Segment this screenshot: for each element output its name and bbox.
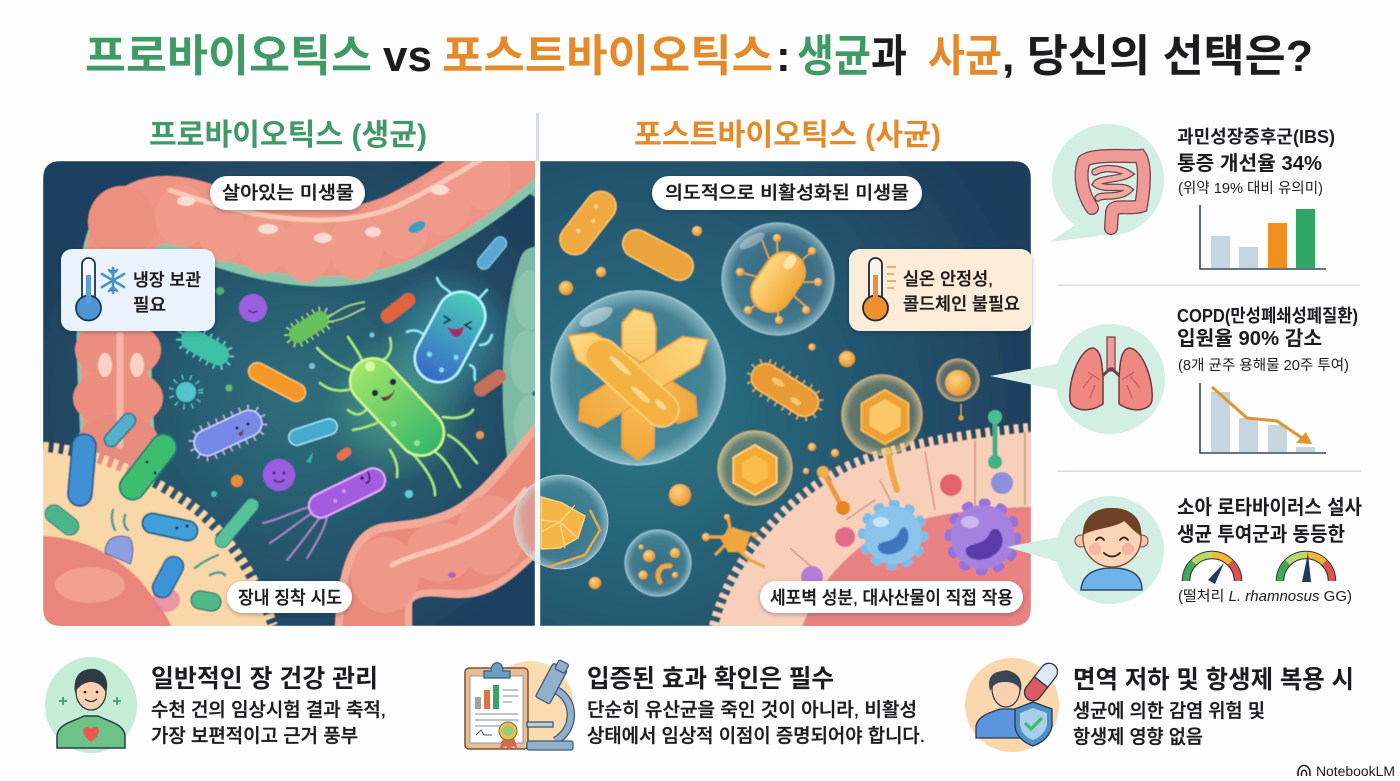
evidence: IBS: 과민성장중후군(IBS) [1177,127,1335,147]
bacteria attaching to villi [41,410,262,612]
callout: refrigeration required [61,249,215,331]
bubble: spiked capsule [722,223,834,335]
star-shaped fragment [702,514,765,567]
gauge: placebo [1186,555,1238,584]
colon upper band [73,138,546,470]
bottom item: immunocompromised and antibiotics: 항생제 영향 없음 [1073,726,1203,748]
icon: healthy person [45,657,137,753]
bottom item: proven efficacy: 단순히 유산균을 죽인 것이 아니라, 비활성 [587,699,917,721]
title: 과 [871,32,907,81]
evidence: pediatric rotavirus [1056,496,1362,605]
icon: cold thermometer [76,258,101,320]
bubble: hexagon lower [718,431,792,505]
heading: postbiotics: 포스트바이오틱스 (사균) [634,119,941,152]
pill label: colonization attempt: 장내 징착 시도 [238,588,342,608]
title: 생균 [797,32,871,81]
small planktonic bacteria [175,234,509,462]
evidence: COPD: 입원율 90% 감소 [1177,327,1322,350]
callout: refrigeration required: 냉장 보관 [133,270,201,290]
epithelium tissue [718,432,1031,627]
smiling purple cells and dots [171,287,484,498]
callout: room temperature stability: 콜드체인 불필요 [903,294,1020,314]
title: 포스트바이오틱스 [442,32,773,81]
callout: room temperature stability: 실온 안정성, [903,269,993,289]
evidence: pediatric rotavirus: (떨처리 L. rhamnosus GG) [1178,588,1352,605]
title: : [776,32,791,81]
capsule upper middle [621,228,695,282]
pill label: intentionally inactivated [652,176,922,210]
icon: lungs in circle [1055,324,1165,434]
icon: clipboard and microscope [465,660,574,750]
panel: postbiotics illustration [540,161,1031,627]
capsule upper left [558,190,618,256]
panel: probiotics gut illustration [41,138,546,627]
title: , 당신의 선택은? [1002,32,1313,81]
evidence: pediatric rotavirus: 소아 로타바이러스 설사 [1177,496,1362,519]
pill label: direct action: 세포벽 성분, 대사산물이 직접 작용 [770,588,1013,608]
gold particles [559,226,855,589]
callout: refrigeration required: 필요 [133,295,166,315]
icon: boy in circle [1056,496,1164,604]
icon: intestine in circle [1052,124,1164,236]
bottom item: proven efficacy: 상태에서 임상적 이점이 증명되어야 합니다. [587,725,925,747]
pill label: direct action [760,581,1023,613]
gauge: L. rhamnosus GG [1280,553,1332,582]
pill label: live microbes: 살아있는 미생물 [222,183,354,203]
NotebookLM mark: NotebookLM [1316,764,1395,779]
evidence: IBS [1052,124,1335,269]
bottom item: proven efficacy: 입증된 효과 확인은 필수 [587,665,834,693]
evidence: COPD [1055,306,1358,453]
bubble: dots lower [625,530,691,596]
bottom item: general gut health: 가장 보편적이고 근거 풍부 [151,725,358,747]
icon: person, capsule and shield [965,658,1061,752]
bubble across divider [514,475,608,569]
bacterium: green hero [317,332,477,495]
bottom item: general gut health: 일반적인 장 건강 관리 [151,665,378,693]
small bubble right [937,359,979,420]
title: vs [383,32,432,81]
speech tails from evidence circles [990,225,1100,565]
icon: snowflake [102,268,124,293]
bacterium: blue laughing [389,274,507,398]
pill label: intentionally inactivated: 의도적으로 비활성화된 미생물 [665,183,909,203]
immune cell purple [949,503,1017,571]
pill label: live microbes [210,176,365,210]
big bubble: crystal and bacterium [551,291,725,465]
bacterium: periwinkle spiked [187,403,269,463]
colon lower right [335,423,535,627]
title: 프로바이오틱스 [85,32,372,81]
immune cell blue [862,504,924,566]
spiked capsule middle [746,358,824,422]
evidence: pediatric rotavirus: 생균 투여군과 동등한 [1177,523,1345,546]
evidence: COPD: (8개 균주 용해물 20주 투여) [1178,357,1349,374]
bar chart: pain improvement [1200,205,1326,269]
heading: probiotics: 프로바이오틱스 (생균) [149,119,427,152]
bottom item: proven efficacy [465,660,925,750]
icon: warm thermometer [863,258,896,320]
bottom item: general gut health [45,657,386,753]
evidence: IBS: 통증 개선율 34% [1177,152,1322,175]
pill label: colonization attempt [227,581,352,613]
evidence: COPD: COPD(만성폐쇄성폐질환) [1177,306,1358,326]
title: 사균 [928,32,1002,81]
bubble: hexagon upper [842,375,922,490]
bottom item: immunocompromised and antibiotics: 면역 저하 및 항생제 복용 시 [1073,666,1354,694]
chart: hospitalization decline [1200,383,1326,453]
bottom item: general gut health: 수천 건의 임상시험 결과 축적, [151,699,386,721]
receptors [817,410,1002,515]
bacterium: purple with tail [263,464,389,560]
bottom item: immunocompromised and antibiotics: 생균에 의한 감염 위험 및 [1073,700,1265,722]
evidence: IBS: (위약 19% 대비 유의미) [1178,180,1323,197]
callout: room temperature stability [849,249,1032,331]
intestinal tissue with villi [43,452,268,627]
bottom item: immunocompromised and antibiotics [965,658,1354,752]
title [85,32,1313,81]
